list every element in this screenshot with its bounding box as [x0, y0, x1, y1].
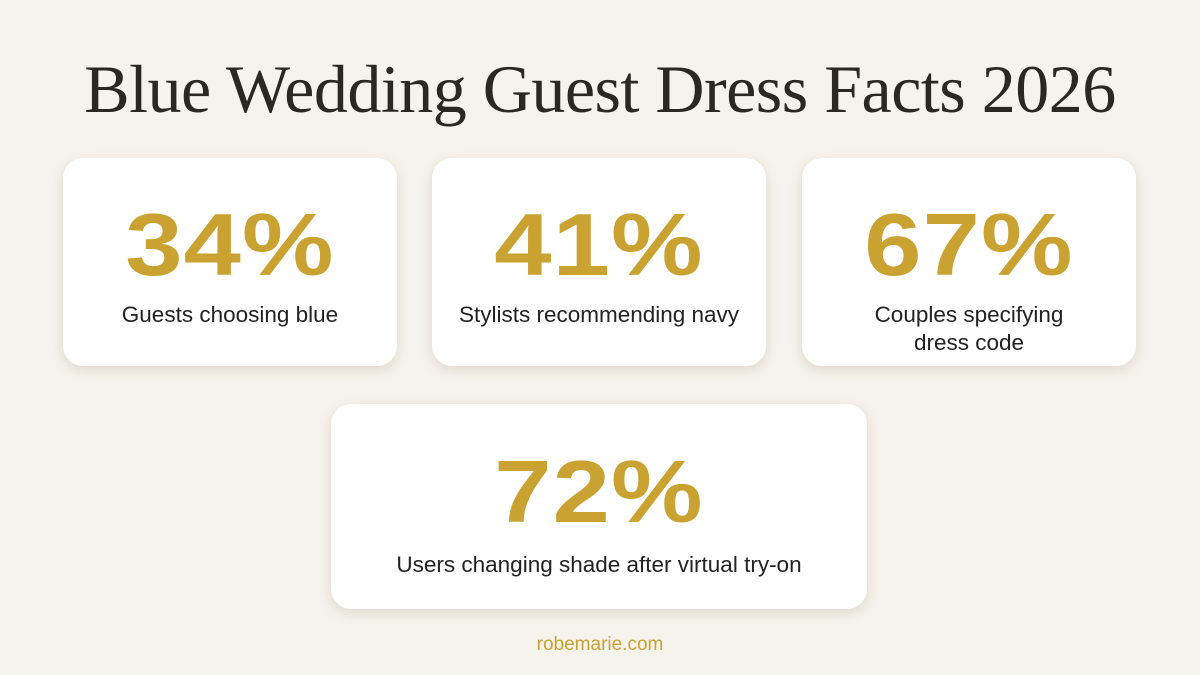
- stat label: dress code: [914, 330, 1024, 355]
- stat number: 72%: [494, 442, 704, 541]
- stat number: 34%: [125, 195, 335, 294]
- footer: robemarie.com: [537, 634, 663, 655]
- stat label: [875, 302, 1063, 355]
- title: Blue Wedding Guest Dress Facts 2026: [84, 51, 1116, 127]
- stat number: 41%: [494, 195, 704, 294]
- stat number: 67%: [864, 195, 1074, 294]
- card: 67%: [802, 158, 1136, 366]
- card: 34%: [63, 158, 397, 366]
- stat label: Guests choosing blue: [122, 302, 338, 327]
- stat label: Users changing shade after virtual try-on: [396, 552, 802, 577]
- stat label: Stylists recommending navy: [459, 302, 739, 327]
- card: 41%: [432, 158, 766, 366]
- card: 72%: [331, 404, 867, 609]
- stat label: Couples specifying: [875, 302, 1063, 327]
